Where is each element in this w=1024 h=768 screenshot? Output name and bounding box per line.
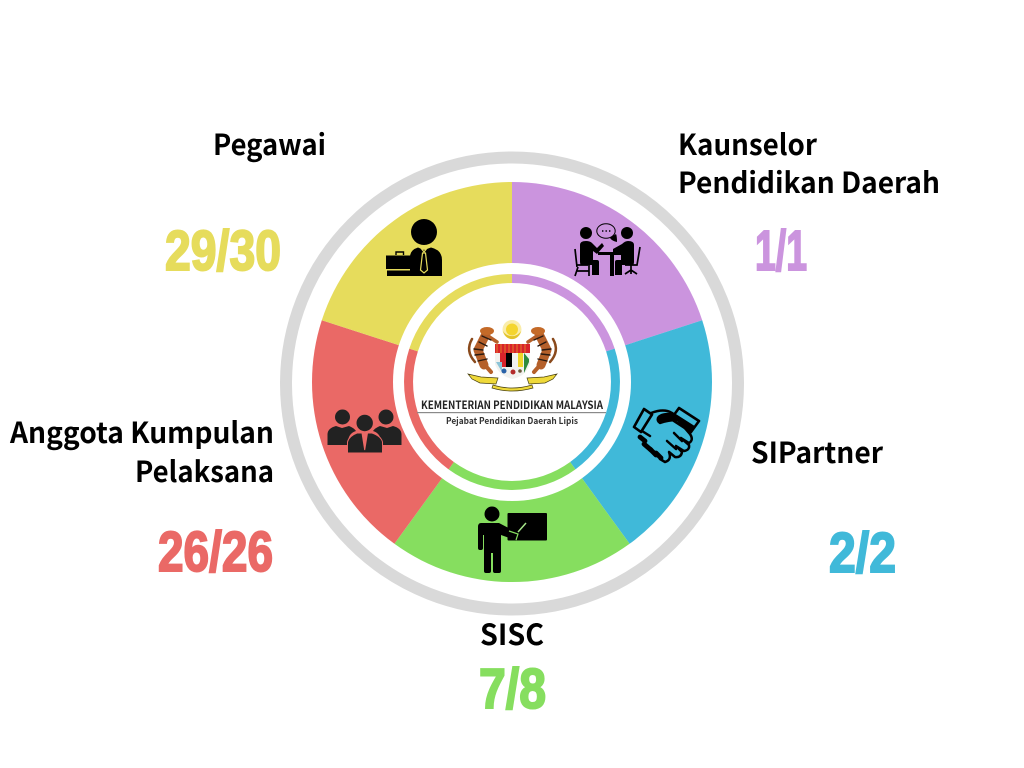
ring arc green	[451, 466, 573, 485]
label: Kaunselor Pendidikan Daerah: Pendidikan Daerah	[678, 160, 940, 202]
inner colored ring	[409, 278, 615, 485]
label: Kaunselor Pendidikan Daerah: Kaunselor	[678, 122, 817, 164]
crest	[468, 320, 557, 391]
segment: Anggota	[312, 320, 512, 544]
inner white disc	[393, 263, 631, 501]
label: SISC: SISC	[480, 612, 544, 654]
value: SIPartner: 2/2	[829, 521, 896, 585]
segment: SISC	[394, 382, 630, 582]
value: Anggota: 26/26	[158, 520, 273, 584]
label: Anggota Kumpulan Pelaksana	[9, 410, 274, 491]
ring arc yellow	[414, 278, 512, 350]
ribbon	[468, 374, 557, 391]
icon: counselling conversation	[575, 224, 640, 276]
icon: handshake	[634, 408, 699, 462]
label: Anggota Kumpulan Pelaksana: Pelaksana	[135, 449, 274, 491]
icon: team of three	[328, 410, 402, 453]
donut chart	[312, 182, 712, 582]
label: Anggota Kumpulan Pelaksana: Anggota Kumpulan	[9, 410, 274, 452]
label: SIPartner: SIPartner	[751, 430, 883, 472]
ministry name: KEMENTERIAN PENDIDIKAN MALAYSIA	[421, 397, 604, 413]
value: Pegawai: 29/30	[165, 219, 281, 283]
ring arc purple	[512, 278, 610, 350]
shield	[495, 344, 530, 379]
ring arc red	[409, 350, 451, 466]
segment: Kaunselor	[512, 182, 702, 382]
segment: Pegawai	[322, 182, 512, 382]
outer grey ring	[286, 158, 738, 610]
segment: SIPartner	[512, 320, 712, 544]
label: Pegawai: Pegawai	[213, 122, 326, 164]
crescent	[503, 331, 521, 339]
value: Kaunselor: 1/1	[755, 219, 807, 283]
value: SISC: 7/8	[479, 657, 546, 721]
ring arc blue	[573, 350, 615, 466]
right tiger	[528, 327, 556, 372]
central logo	[421, 320, 604, 427]
office name: Pejabat Pendidikan Daerah Lipis	[446, 414, 578, 427]
left tiger	[469, 327, 497, 372]
label: Kaunselor Pendidikan Daerah	[678, 122, 940, 202]
icon: officer with briefcase	[386, 219, 442, 276]
icon: teacher at board	[478, 506, 547, 573]
sun	[502, 320, 522, 339]
